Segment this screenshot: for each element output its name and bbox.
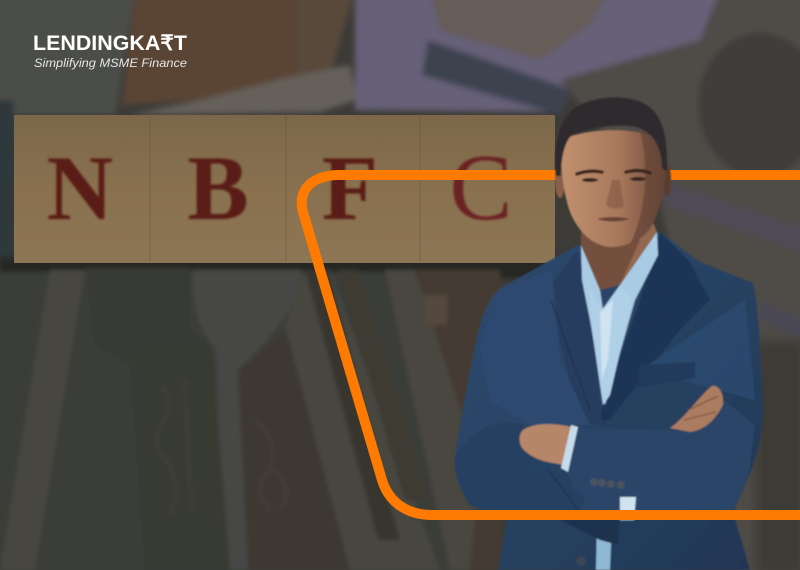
neck (581, 215, 657, 285)
block letters: C (450, 136, 512, 240)
lapel line (548, 265, 684, 512)
sleeve buttons (590, 478, 625, 489)
pocket (638, 362, 695, 388)
ornate right panel (238, 330, 352, 570)
eyebrows and eyes (575, 169, 652, 182)
hair (555, 97, 667, 176)
note: purple banknote (355, 0, 720, 112)
note: tan top centre (430, 0, 610, 60)
block letters (47, 136, 512, 240)
logo (33, 32, 187, 70)
portrait: dark engraved circle (698, 33, 800, 177)
block letters: B (187, 137, 249, 239)
shadow below blocks (0, 258, 560, 278)
dark medallion top (85, 268, 215, 570)
pale strip right (285, 270, 440, 570)
right hand fingers (670, 386, 723, 432)
text band right (338, 270, 430, 500)
ornate left panel (140, 345, 230, 570)
block letters: F (322, 137, 378, 239)
ears (555, 162, 565, 198)
pale band far right (385, 270, 480, 570)
nose shadow (606, 180, 624, 209)
man: portrait (455, 97, 763, 570)
left hand (519, 424, 572, 465)
wooden NBFC blocks (14, 114, 555, 263)
block letters: N (47, 137, 113, 239)
note: top-left pale banknote (0, 0, 135, 115)
band: purple right (665, 182, 800, 255)
note: tan banknote corner (298, 0, 355, 80)
shirt (581, 232, 658, 405)
shirt cuff (561, 425, 578, 472)
logo wordmark: LENDINGKA₹T (33, 32, 187, 55)
jacket: shaded chest (598, 232, 710, 420)
orange frame (302, 175, 800, 515)
text strokes (157, 380, 286, 515)
orange frame: bottom bar over man (432, 510, 800, 520)
mouth (597, 217, 630, 222)
note: top-right banknote (560, 0, 800, 570)
left arm sleeve (front) (563, 400, 755, 512)
note: pale paper strip (130, 65, 357, 115)
note: left dark edge (0, 100, 14, 270)
tagline: Simplifying MSME Finance (34, 56, 187, 70)
shadow right of face (630, 130, 666, 244)
jacket (455, 232, 763, 570)
right side below (755, 340, 800, 570)
lower notes (0, 258, 560, 570)
dark text band (305, 270, 400, 540)
pale tulip shape (192, 270, 302, 570)
patch: dark purple band (422, 40, 572, 115)
brown note right (415, 270, 500, 570)
note: brown banknote (122, 0, 300, 105)
pale vertical strip left (0, 270, 85, 570)
lower shirt and front (620, 497, 636, 520)
back arm sleeve (455, 422, 585, 518)
face (561, 130, 666, 247)
